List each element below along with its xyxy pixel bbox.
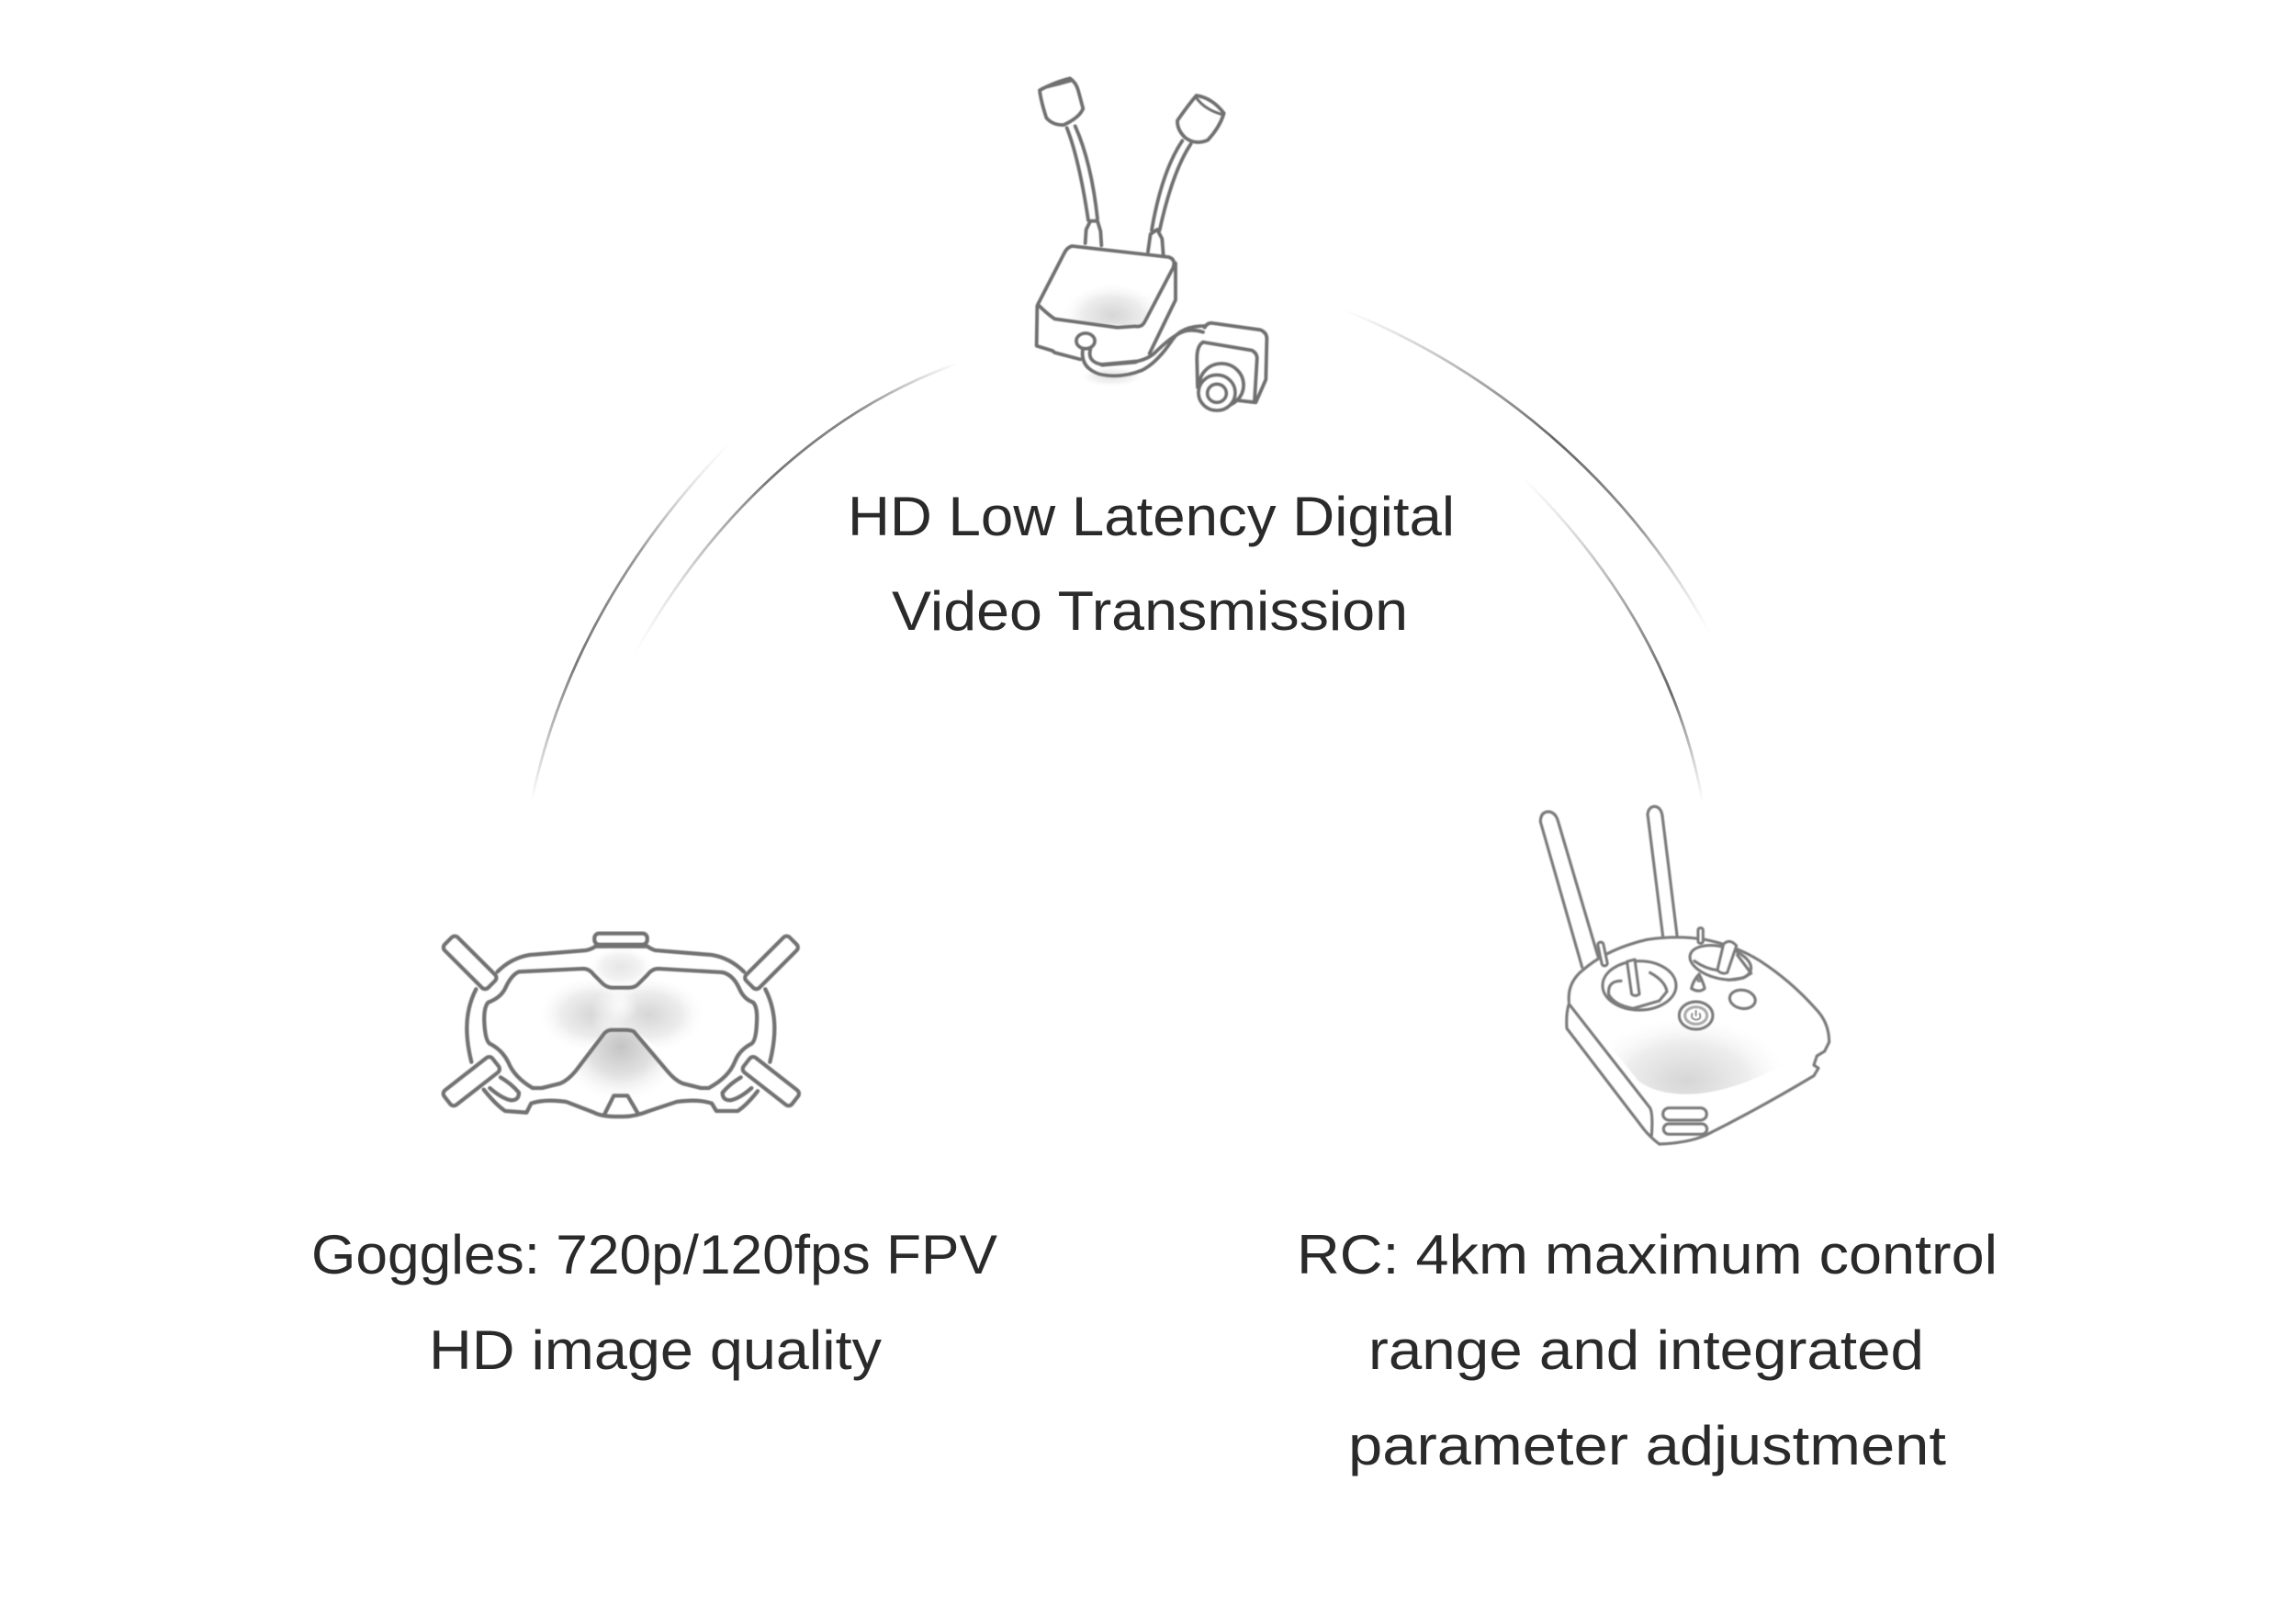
icon: FPV goggles	[442, 934, 801, 1117]
caption: video transmission: HD Low Latency Digital	[848, 486, 1455, 547]
caption: video transmission	[848, 486, 1455, 642]
caption: goggles: HD image quality	[429, 1319, 882, 1381]
caption: goggles: Goggles: 720p/120fps FPV	[311, 1224, 997, 1285]
connecting arc: left	[532, 364, 957, 801]
caption: remote controller: RC: 4km maximum control	[1297, 1224, 1998, 1285]
caption: goggles	[311, 1224, 997, 1381]
icon: remote controller	[1540, 806, 1829, 1148]
icon: air unit with antennas and camera	[1037, 78, 1266, 410]
caption: remote controller: range and integrated	[1368, 1319, 1924, 1381]
caption: video transmission: Video Transmission	[892, 580, 1408, 642]
connecting arc: right	[1345, 310, 1710, 803]
infographic canvas	[314, 75, 1994, 1476]
caption: remote controller	[1297, 1224, 1998, 1476]
caption: remote controller: parameter adjustment	[1348, 1415, 1946, 1476]
